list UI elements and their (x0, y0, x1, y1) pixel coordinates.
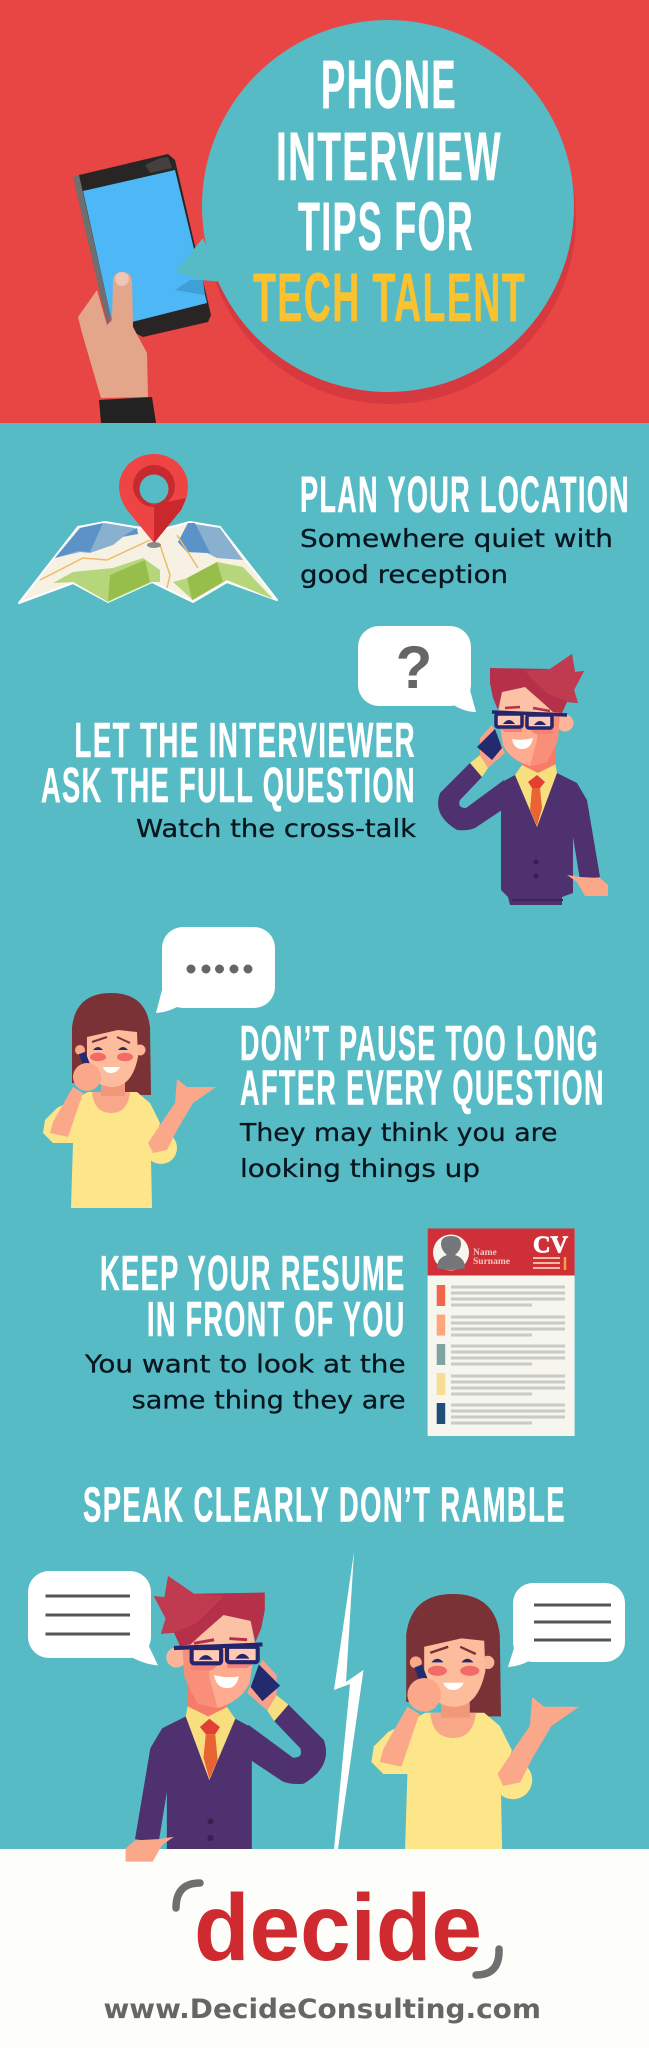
body text (239, 1118, 558, 1183)
icon: map with pin (19, 454, 277, 603)
body text (300, 524, 613, 589)
footer panel (0, 1849, 649, 2048)
question speech bubble: ? (396, 634, 432, 701)
icon: CV document (428, 1228, 575, 1436)
title (253, 46, 526, 336)
speech bubble (175, 20, 576, 404)
body text: same thing they are (132, 1386, 406, 1415)
tip 4: keep your resume (84, 1228, 575, 1436)
man on phone, mirrored (126, 1576, 326, 1872)
lightning bolt (334, 1552, 364, 1849)
dots speech bubble (156, 927, 275, 1013)
tip 1: plan your location (19, 454, 630, 603)
question speech bubble (358, 626, 476, 712)
heading (100, 1247, 406, 1347)
icon: CV document: Surname (473, 1257, 510, 1267)
tip 5: speak clearly (28, 1479, 625, 1872)
body text (84, 1350, 406, 1415)
body text: good reception (300, 560, 508, 589)
body text: They may think you are (239, 1118, 558, 1147)
logo: decide (194, 1875, 482, 1981)
icon: hand holding phone (73, 154, 211, 423)
tip 3: don't pause too long (43, 927, 605, 1208)
woman on phone (43, 993, 216, 1208)
title: TIPS FOR (298, 188, 474, 265)
body text: Watch the cross-talk (136, 814, 417, 843)
icon: CV document: Name (473, 1248, 497, 1258)
heading: IN FRONT OF YOU (147, 1293, 406, 1347)
left speech bubble (28, 1571, 158, 1666)
woman on phone, large (371, 1594, 579, 1852)
man on phone (438, 654, 608, 905)
right speech bubble (508, 1583, 625, 1667)
heading (41, 714, 416, 813)
body text: Somewhere quiet with (300, 524, 613, 553)
header panel (0, 0, 649, 423)
heading (240, 1017, 605, 1116)
body text: looking things up (240, 1154, 480, 1183)
title: PHONE (321, 46, 457, 123)
heading: KEEP YOUR RESUME (100, 1247, 406, 1301)
tip 2: let the interviewer ask (41, 626, 608, 905)
icon: CV document: CV (533, 1232, 569, 1258)
website url: www.DecideConsulting.com (104, 1994, 541, 2025)
body text: You want to look at the (84, 1350, 406, 1378)
